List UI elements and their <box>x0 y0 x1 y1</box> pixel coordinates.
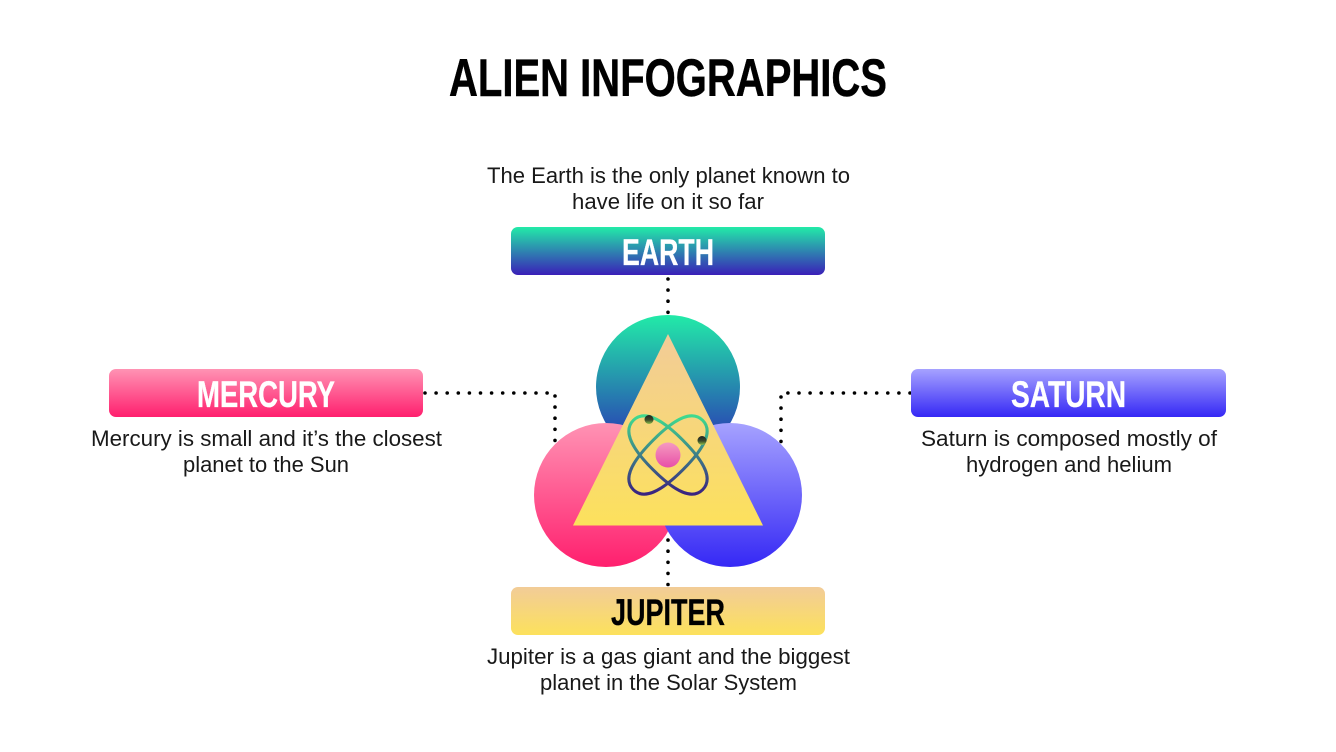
earth description: The Earth is the only planet known to <box>487 163 850 188</box>
central diagram <box>534 315 802 567</box>
saturn label bar <box>911 369 1226 417</box>
mercury description: planet to the Sun <box>183 452 349 477</box>
dotted connectors <box>425 279 910 586</box>
mercury description: Mercury is small and it’s the closest <box>91 426 442 451</box>
panel: mercury <box>91 369 442 477</box>
atom orbits <box>629 416 707 494</box>
panel: jupiter <box>487 587 850 695</box>
circle: saturn <box>658 423 802 567</box>
jupiter description: planet in the Solar System <box>540 670 797 695</box>
atom nucleus <box>656 442 680 468</box>
saturn label: SATURN <box>1011 374 1126 415</box>
icon: atom <box>629 415 707 494</box>
saturn description: Saturn is composed mostly of <box>921 426 1218 451</box>
atom electron left <box>644 415 654 424</box>
mercury label: MERCURY <box>197 374 335 415</box>
earth label bar <box>511 227 825 275</box>
triangle: jupiter <box>573 334 763 526</box>
atom electron right <box>698 436 706 445</box>
earth description: have life on it so far <box>572 189 764 214</box>
panel: earth <box>487 163 850 275</box>
saturn description: hydrogen and helium <box>966 452 1172 477</box>
mercury label bar <box>109 369 423 417</box>
circle: mercury <box>534 423 678 567</box>
panel: saturn <box>911 369 1226 477</box>
earth label: EARTH <box>622 232 714 273</box>
jupiter description: Jupiter is a gas giant and the biggest <box>487 644 850 669</box>
circle: earth <box>596 315 740 459</box>
jupiter label: JUPITER <box>611 592 725 633</box>
title: ALIEN INFOGRAPHICS <box>449 49 887 108</box>
jupiter label bar <box>511 587 825 635</box>
